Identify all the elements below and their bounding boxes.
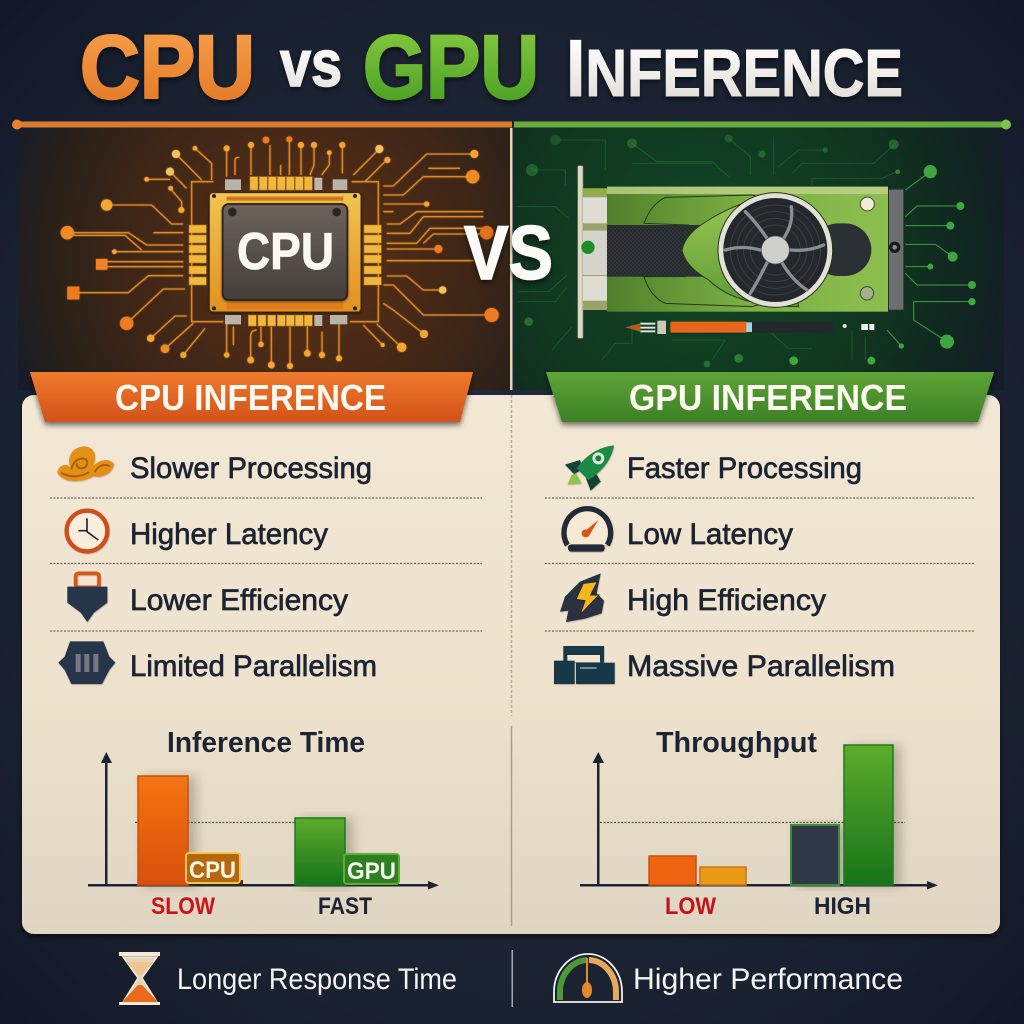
label: high: HIGH bbox=[814, 893, 871, 920]
header rule: GPU bbox=[514, 120, 1011, 130]
trait: high efficiency: High Efficiency bbox=[627, 584, 826, 617]
title: vs bbox=[280, 26, 342, 100]
label: low: LOW bbox=[665, 893, 716, 920]
bar: GPU time bbox=[295, 818, 345, 885]
icon: limited core bbox=[58, 641, 115, 684]
icon: clock bbox=[67, 511, 107, 551]
icon: rocket bbox=[565, 445, 614, 491]
footer text: response time: Longer Response Time bbox=[177, 963, 457, 996]
label: slow: SLOW bbox=[151, 893, 215, 920]
banner: GPU inference bbox=[546, 372, 994, 422]
trait: limited parallelism: Limited Parallelism bbox=[130, 650, 377, 683]
tag: CPU: CPU bbox=[189, 857, 236, 884]
icon: CPU circuit traces bbox=[61, 136, 499, 369]
panel: CPU hero bbox=[12, 120, 512, 390]
label: fast: FAST bbox=[318, 893, 372, 920]
chart: throughput bbox=[580, 727, 938, 920]
vs badge: VS bbox=[464, 211, 553, 296]
tag: GPU: GPU bbox=[347, 858, 396, 885]
list: CPU traits bbox=[130, 452, 377, 683]
chart title: Throughput bbox=[656, 727, 817, 759]
header rule: CPU bbox=[12, 120, 512, 130]
panel: GPU hero bbox=[514, 120, 1011, 390]
icon: lightning bbox=[560, 573, 604, 622]
icon: CPU chip bbox=[189, 177, 381, 326]
axes bbox=[88, 752, 439, 890]
icon: tangled knot bbox=[57, 446, 114, 481]
bar: CPU time bbox=[138, 776, 188, 885]
icon: speedometer bbox=[564, 509, 611, 552]
banner: GPU inference: GPU INFERENCE bbox=[629, 377, 907, 418]
trait: slower processing: Slower Processing bbox=[130, 452, 372, 485]
title bbox=[80, 18, 903, 118]
footer bbox=[119, 950, 903, 1007]
icon: GPU connector bbox=[625, 321, 874, 334]
icon: performance gauge bbox=[554, 954, 622, 1002]
trait: massive parallelism: Massive Parallelism bbox=[627, 650, 895, 683]
icon: server block bbox=[554, 646, 615, 684]
icons: GPU traits bbox=[554, 445, 615, 684]
title: INFERENCE bbox=[566, 24, 903, 114]
icon: hourglass bbox=[119, 952, 160, 1005]
title: GPU bbox=[363, 18, 539, 118]
trait: low latency: Low Latency bbox=[627, 518, 793, 551]
chart: inference time bbox=[88, 727, 439, 920]
panel: cream comparison card bbox=[22, 128, 1000, 934]
banner: CPU inference: CPU INFERENCE bbox=[115, 377, 386, 418]
axes bbox=[580, 752, 938, 890]
icons: CPU traits bbox=[57, 446, 115, 684]
trait: higher latency: Higher Latency bbox=[130, 518, 328, 551]
footer text: performance: Higher Performance bbox=[633, 963, 903, 996]
chip label: CPU bbox=[237, 223, 334, 281]
banner: CPU inference bbox=[30, 372, 473, 422]
bar: GPU high dark bbox=[791, 825, 839, 885]
trait: faster processing: Faster Processing bbox=[627, 452, 862, 485]
list: GPU traits bbox=[627, 452, 895, 683]
bar: GPU high bbox=[844, 745, 893, 885]
icon: plug bbox=[67, 573, 107, 622]
icon: GPU circuit traces bbox=[517, 134, 976, 367]
icon: GPU fan bbox=[718, 193, 833, 307]
title: CPU bbox=[80, 18, 255, 118]
bar: CPU low bbox=[649, 856, 696, 885]
trait: lower efficiency: Lower Efficiency bbox=[130, 584, 348, 617]
chart title: Inference Time bbox=[167, 727, 365, 759]
bar: CPU low secondary bbox=[700, 867, 746, 885]
icon: GPU card bbox=[578, 166, 904, 338]
